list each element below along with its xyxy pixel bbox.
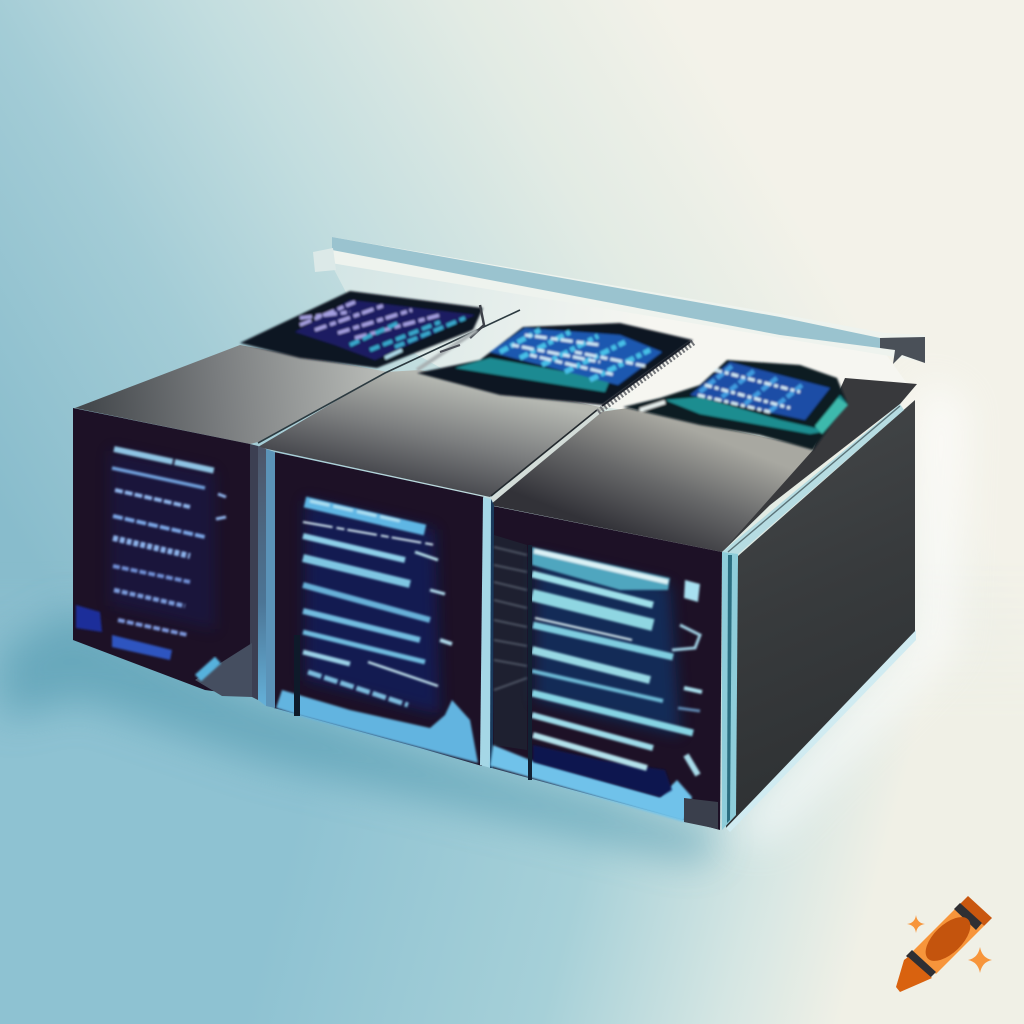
panel: right side face	[722, 400, 916, 832]
lower blue strip	[112, 635, 172, 660]
cables between boards	[417, 305, 484, 370]
navy glow behind the slots	[110, 450, 215, 630]
side rail	[266, 449, 275, 708]
grey rack section	[494, 535, 527, 750]
tray behind the units	[328, 258, 908, 410]
floor shadow	[0, 610, 720, 860]
icon: sparkles	[907, 915, 925, 933]
panel: top face of the middle unit	[258, 370, 605, 497]
server unit: middle	[266, 449, 484, 766]
blue corner accent	[198, 660, 218, 678]
status lights	[672, 580, 702, 775]
glowing drive slots	[112, 449, 226, 635]
glowing drive slots	[532, 547, 693, 768]
left top circuit board	[240, 291, 483, 368]
server unit: left	[73, 408, 266, 706]
panel: top face of the left unit	[75, 345, 388, 444]
side rail	[250, 444, 258, 700]
server unit: right	[480, 497, 722, 830]
front face	[274, 452, 484, 766]
front face	[492, 506, 722, 830]
icon: crayon watermark	[896, 896, 992, 992]
middle top circuit board	[417, 323, 693, 405]
glowing drive slots	[303, 501, 452, 705]
top rail	[313, 237, 925, 364]
panel: dark rear corner of the right unit top	[722, 378, 917, 552]
divider rail	[480, 497, 491, 768]
panel: top face of the right unit	[490, 408, 825, 552]
bright glow behind the right side of the unit	[730, 380, 965, 840]
navy glow behind the slots	[305, 500, 440, 715]
front face	[73, 408, 250, 696]
seams between the units	[258, 310, 694, 500]
vertical bar	[294, 635, 300, 716]
bottom blue glow strip	[276, 690, 478, 763]
right top circuit board	[623, 360, 848, 450]
navy glow behind the slots	[535, 555, 680, 735]
vertical bar	[528, 545, 532, 780]
bottom blue glow strip	[490, 745, 692, 822]
